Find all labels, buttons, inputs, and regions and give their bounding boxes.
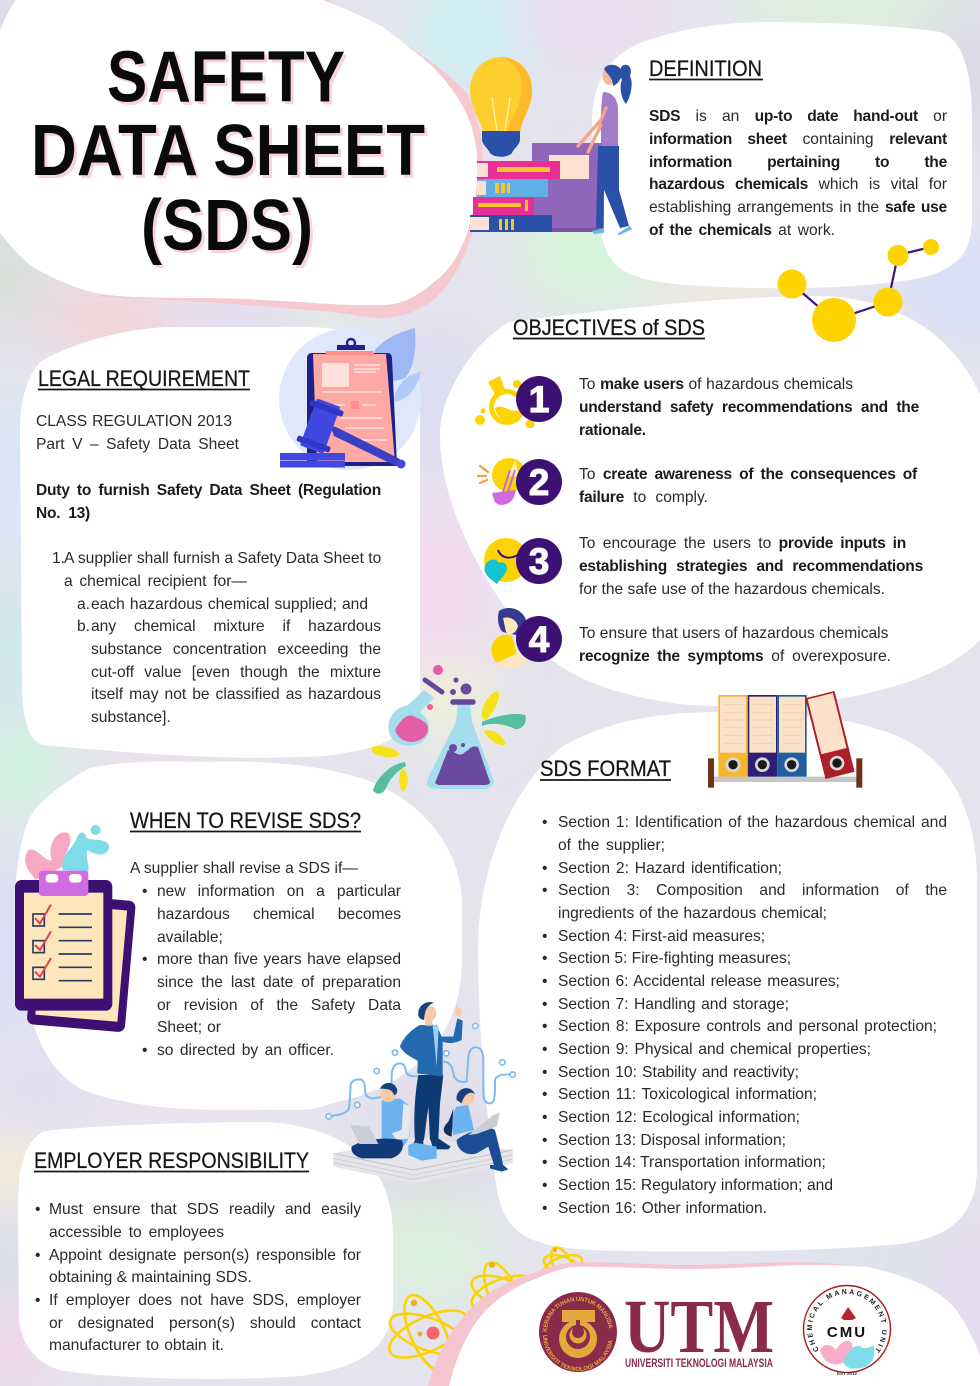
text: employer bullets: obtaining & maintaining SDS. — [49, 1269, 252, 1286]
icon: objective 1 badge — [475, 376, 562, 428]
panel: legal requirement — [20, 327, 420, 758]
icon: seated woman — [444, 1088, 508, 1172]
text: objective 2 — [579, 466, 918, 506]
panel: when to revise: • — [142, 883, 147, 900]
panel: SDS format: • — [542, 1200, 547, 1217]
text: duty to furnish: Duty to furnish Safety Data Sheet (Regulation — [36, 482, 381, 499]
text: section list — [542, 814, 947, 1217]
logo: UTM wordmark: UTM — [624, 1285, 774, 1369]
panel: definition — [592, 22, 972, 288]
heading: SDS format: SDS FORMAT — [540, 756, 671, 781]
panel: when to revise: • — [142, 951, 147, 968]
text: supplier clause: cut-off value [even though the mixture — [91, 664, 381, 681]
text: objective 1: To make users of hazardous chemicals — [579, 376, 853, 393]
text: objective 2: To create awareness of the consequences of — [579, 466, 917, 483]
icon: objective 1 badge: 1 — [529, 379, 549, 420]
icon: objective 3 badge — [484, 538, 562, 584]
text: objective 4: To ensure that users of hazardous chemicals — [579, 625, 888, 642]
text: definition body: hazardous chemicals which is vital for — [649, 176, 947, 193]
panel: employer responsibility: • — [35, 1292, 40, 1309]
illustration: lightbulb, books and woman — [470, 57, 632, 235]
icon: objective 4 badge — [492, 608, 562, 668]
text: revise bullets: available; — [157, 929, 223, 946]
text: revise intro: A supplier shall revise a SDS if— — [130, 860, 358, 877]
text: duty to furnish: No. 13) — [36, 505, 90, 522]
text: supplier clause: each hazardous chemical supplied; and — [91, 596, 368, 613]
text: revise bullets: more than five years have elapsed — [157, 951, 401, 968]
text: section list: Section 13: Disposal information; — [558, 1132, 786, 1149]
text: supplier clause: b. — [77, 618, 90, 635]
icon: objective 3 badge: 3 — [529, 541, 549, 582]
icon: woman — [578, 65, 632, 235]
text: objective 3 — [579, 535, 923, 598]
panel: employer responsibility: • — [35, 1247, 40, 1264]
text: section list: Section 1: Identification of the hazardous chemical and — [558, 814, 947, 831]
text: section list: Section 12: Ecological information; — [558, 1109, 800, 1126]
panel: when to revise: • — [142, 1042, 147, 1059]
text: employer bullets: manufacturer to obtain it. — [49, 1337, 224, 1354]
panel: SDS format: • — [542, 814, 547, 831]
panel: SDS format: • — [542, 928, 547, 945]
text: employer bullets — [35, 1201, 361, 1354]
panel: SDS format: • — [542, 950, 547, 967]
text: revise bullets: Sheet; or — [157, 1019, 221, 1036]
illustration: binders on shelf — [708, 691, 862, 788]
illustration: team of people — [325, 1002, 516, 1180]
heading: safety data sheet (SDS): SAFETY — [107, 38, 345, 118]
panel: objectives — [440, 296, 980, 706]
panel: SDS format — [478, 712, 977, 1252]
text: objective 1 — [579, 376, 919, 439]
text: objective 1: understand safety recommendations and the — [579, 399, 919, 416]
panel: footer logos — [428, 1262, 980, 1386]
logo: chemical management unit: CHEMICAL MANAGEMENT UNIT — [807, 1289, 887, 1354]
icon: platform — [333, 1137, 513, 1183]
panel: when to revise — [16, 762, 462, 1110]
panel: SDS format: • — [542, 860, 547, 877]
illustration: clipboard and gavel — [279, 328, 421, 470]
panel: SDS format: • — [542, 1132, 547, 1149]
panel: SDS format: • — [542, 1154, 547, 1171]
text: objective 3: for the safe use of the hazardous chemicals. — [579, 581, 885, 598]
text: supplier clause: substance]. — [91, 709, 171, 726]
illustration: flasks — [372, 665, 526, 794]
text: section list: Section 16: Other information. — [558, 1200, 767, 1217]
heading: employer responsibility: EMPLOYER RESPONSIBILITY — [34, 1148, 309, 1173]
text: objective 1: rationale. — [579, 422, 646, 439]
icon: objective 2 badge — [477, 458, 562, 505]
text: supplier clause: itself may not be classified as hazardous — [91, 686, 381, 703]
text: section list: Section 11: Toxicological information; — [558, 1086, 817, 1103]
text: objective 4 — [579, 625, 891, 665]
logo: UTM crest: KERANA TUHAN UNTUK MANUSIA — [542, 1296, 613, 1332]
icon: round flask — [388, 680, 442, 746]
text: definition body: information pertaining to the — [649, 154, 947, 171]
text: supplier clause: substance concentration exceeding the — [91, 641, 381, 658]
text: supplier clause: any chemical mixture if hazardous — [91, 618, 381, 635]
icon: books — [470, 161, 560, 232]
logo: UTM wordmark: UNIVERSITI TEKNOLOGI MALAYSIA — [625, 1358, 773, 1370]
text: section list: Section 6: Accidental release measures; — [558, 973, 840, 990]
logo: chemical management unit: CMU — [827, 1324, 867, 1341]
text: regulation reference: CLASS REGULATION 2013 — [36, 413, 232, 430]
text: supplier clause: a chemical recipient for— — [64, 573, 247, 590]
text: employer bullets: Appoint designate person(s) responsible for — [49, 1247, 361, 1264]
text: section list: Section 2: Hazard identification; — [558, 860, 782, 877]
text: supplier clause — [52, 550, 381, 726]
text: section list: Section 15: Regulatory information; and — [558, 1177, 833, 1194]
heading: objectives: OBJECTIVES of SDS — [513, 315, 705, 340]
text: definition body: information sheet containing relevant — [649, 131, 947, 148]
text: definition body: SDS is an up-to date hand-out or — [649, 108, 947, 125]
panel: SDS format: • — [542, 1018, 547, 1035]
text: duty to furnish — [36, 482, 381, 522]
text: regulation reference: Part V – Safety Data Sheet — [36, 436, 239, 453]
heading: safety data sheet (SDS): DATA SHEET — [31, 111, 425, 191]
icon: standing man — [400, 1002, 463, 1149]
logo: chemical management unit: EST 2012 — [837, 1371, 858, 1376]
text: revise bullets: hazardous chemical becomes — [157, 906, 401, 923]
text: objective 3: To encourage the users to provide inputs in — [579, 535, 906, 552]
text: definition body: establishing arrangements in the safe use — [649, 199, 947, 216]
panel: SDS format: • — [542, 1109, 547, 1126]
icon: objective 4 badge: 4 — [529, 619, 550, 660]
logo: UTM crest: UNIVERSITI TEKNOLOGI MALAYSIA — [542, 1335, 612, 1372]
text: supplier clause: a. — [77, 596, 90, 613]
text: section list: of the supplier; — [558, 837, 665, 854]
panel: SDS format: • — [542, 1064, 547, 1081]
logo: UTM crest — [539, 1292, 617, 1372]
text: supplier clause: A supplier shall furnish a Safety Data Sheet to — [64, 550, 381, 567]
text: revise bullets: since the last date of preparation — [157, 974, 401, 991]
icon: conical flask — [427, 702, 493, 789]
text: revise bullets — [142, 883, 402, 1059]
text: section list: ingredients of the hazardous chemical; — [558, 905, 827, 922]
text: section list: Section 14: Transportation information; — [558, 1154, 826, 1171]
panel: SDS format: • — [542, 1041, 547, 1058]
icon: objective 2 badge: 2 — [529, 462, 549, 503]
text: section list: Section 9: Physical and chemical properties; — [558, 1041, 871, 1058]
text: definition body — [649, 108, 947, 239]
heading: legal requirement: LEGAL REQUIREMENT — [38, 366, 250, 391]
panel: employer responsibility: • — [35, 1201, 40, 1218]
text: section list: Section 3: Composition and information of the — [558, 882, 947, 899]
panel: employer responsibility — [18, 1122, 393, 1379]
panel: SDS format: • — [542, 973, 547, 990]
text: regulation reference — [36, 413, 239, 453]
text: employer bullets: If employer does not have SDS, employer — [49, 1292, 361, 1309]
heading: definition: DEFINITION — [649, 56, 762, 81]
panel: title — [0, 0, 484, 318]
icon: circuit lines — [326, 1023, 515, 1119]
text: supplier clause: 1. — [52, 550, 65, 567]
text: objective 4: recognize the symptoms of overexposure. — [579, 648, 891, 665]
text: objective 3: establishing strategies and recommendations — [579, 558, 923, 575]
text: section list: Section 5: Fire-fighting measures; — [558, 950, 791, 967]
text: section list: Section 4: First-aid measures; — [558, 928, 765, 945]
text: section list: Section 8: Exposure controls and personal protection; — [558, 1018, 937, 1035]
text: revise bullets: or revision of the Safety Data — [157, 997, 401, 1014]
panel: SDS format: • — [542, 1177, 547, 1194]
text: revise bullets: so directed by an officer. — [157, 1042, 334, 1059]
text: employer bullets: Must ensure that SDS readily and easily — [49, 1201, 361, 1218]
text: section list: Section 10: Stability and reactivity; — [558, 1064, 799, 1081]
text: employer bullets: accessible to employees — [49, 1224, 224, 1241]
panel: SDS format: • — [542, 882, 547, 899]
panel: SDS format: • — [542, 1086, 547, 1103]
heading: safety data sheet (SDS) — [31, 38, 425, 266]
icon: bag — [408, 1143, 437, 1161]
icon: atoms — [388, 1246, 584, 1370]
text: employer bullets: or designated person(s) should contact — [49, 1315, 361, 1332]
illustration: checklist clipboard — [15, 825, 136, 1032]
text: definition body: of the chemicals at work. — [649, 222, 835, 239]
icon: seated man — [350, 1083, 411, 1158]
icon: light bulb — [470, 57, 532, 157]
text: revise bullets: new information on a particular — [157, 883, 401, 900]
icon: binder — [532, 143, 604, 232]
logo: chemical management unit — [802, 1284, 892, 1376]
icon: molecule — [778, 239, 939, 342]
text: objective 2: failure to comply. — [579, 489, 708, 506]
heading: safety data sheet (SDS): (SDS) — [141, 186, 313, 266]
panel: SDS format: • — [542, 996, 547, 1013]
heading: when to revise: WHEN TO REVISE SDS? — [130, 808, 361, 833]
text: section list: Section 7: Handling and storage; — [558, 996, 789, 1013]
